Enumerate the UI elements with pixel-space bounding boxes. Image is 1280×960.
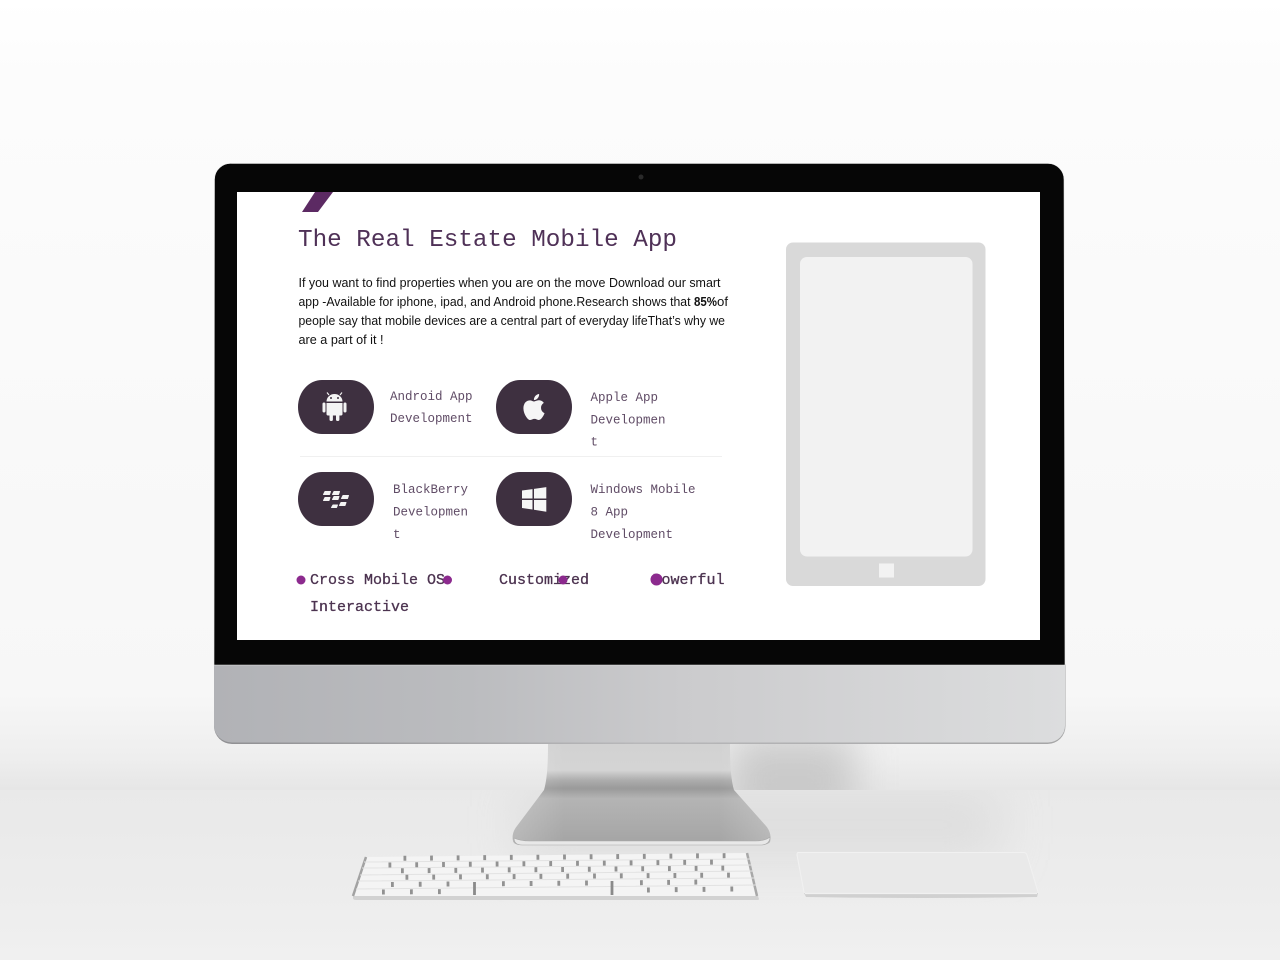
tablet home button xyxy=(879,564,894,578)
bullet labels: Powerful xyxy=(652,572,725,589)
trackpad xyxy=(797,852,1038,898)
android label xyxy=(390,390,473,426)
bullet labels: Cross Mobile OS xyxy=(310,572,445,589)
tablet placeholder xyxy=(786,242,986,586)
feature: blackberry xyxy=(298,472,469,542)
windows pill icon xyxy=(496,472,572,526)
apple label: Developmen xyxy=(590,414,666,428)
blackberry label: Developmen xyxy=(393,506,468,520)
windows label: Development xyxy=(590,528,673,542)
title: The Real Estate Mobile App xyxy=(298,227,677,254)
slide content xyxy=(296,192,986,616)
stand xyxy=(513,744,771,845)
keyboard xyxy=(353,853,759,900)
intro paragraph: of xyxy=(717,295,729,309)
windows label xyxy=(590,483,696,542)
tablet screen xyxy=(800,257,972,556)
screen xyxy=(237,192,1040,640)
bullet labels: Interactive xyxy=(310,599,409,616)
android pill icon xyxy=(298,380,374,434)
bullet labels: Customized xyxy=(499,572,589,589)
blackberry pill icon xyxy=(298,472,374,526)
monitor chin xyxy=(214,664,1066,744)
bullet labels xyxy=(310,572,725,616)
apple label: t xyxy=(590,436,598,450)
apple label: Apple App xyxy=(590,391,658,405)
android label: Android App xyxy=(390,390,473,404)
windows label: Windows Mobile xyxy=(590,483,696,497)
feature: apple xyxy=(496,380,666,450)
monitor xyxy=(214,163,1066,744)
windows label: 8 App xyxy=(590,506,628,520)
android label: Development xyxy=(390,412,473,426)
blackberry label: t xyxy=(393,528,401,542)
row divider xyxy=(300,456,722,457)
blackberry label xyxy=(393,483,469,542)
camera xyxy=(638,174,644,180)
feature: android xyxy=(298,380,473,434)
intro paragraph: are a part of it ! xyxy=(298,333,384,347)
apple label xyxy=(590,391,666,450)
bullet list xyxy=(296,572,725,616)
intro paragraph xyxy=(298,276,729,347)
stand shadow on wall xyxy=(730,744,870,790)
blackberry label: BlackBerry xyxy=(393,483,469,497)
apple pill icon xyxy=(496,380,572,434)
feature: windows xyxy=(496,472,696,542)
stand shadow on desk xyxy=(548,799,985,854)
corner accent slash xyxy=(302,192,333,212)
intro paragraph: people say that mobile devices are a central part of everyday lifeThat’s why we xyxy=(298,314,725,328)
desk surface xyxy=(0,790,1280,960)
intro paragraph: 85% xyxy=(694,295,717,309)
intro paragraph: app -Available for iphone, ipad, and Android phone.Research shows that xyxy=(298,295,691,309)
monitor bezel xyxy=(214,163,1065,665)
bullet dots xyxy=(296,574,662,586)
intro paragraph: If you want to find properties when you are on the move Download our smart xyxy=(298,276,721,290)
